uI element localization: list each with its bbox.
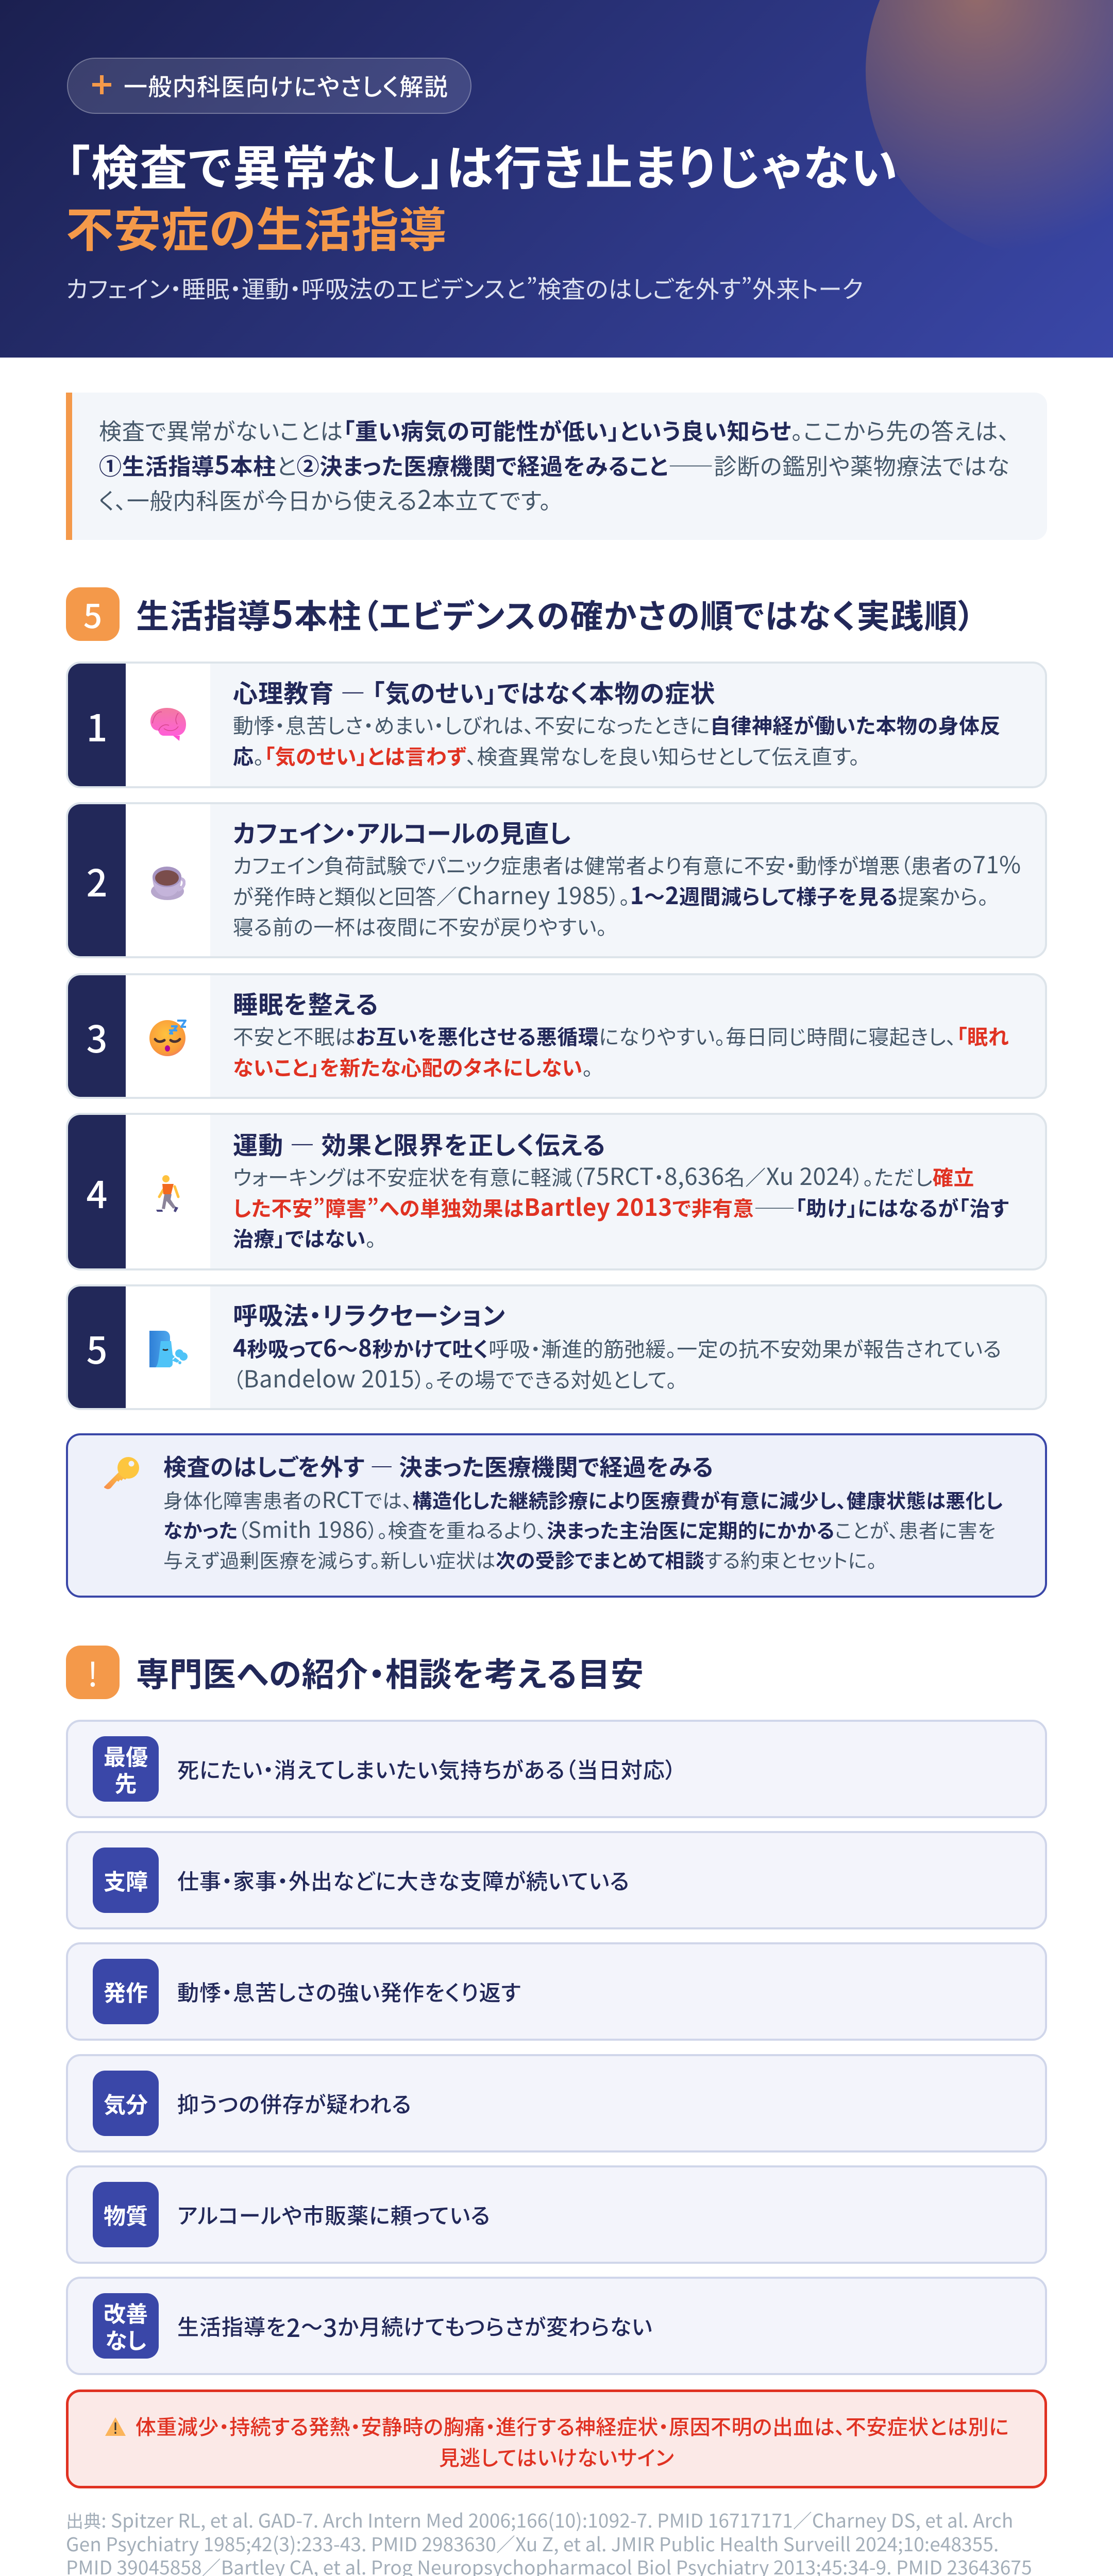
item: impairment <box>66 1831 1047 1929</box>
number 3: 3 <box>86 1009 108 1063</box>
panel: pillar 1 <box>66 662 1047 788</box>
tag <box>93 2182 159 2247</box>
panel: pillar 4 <box>66 1113 1047 1270</box>
pillar body: 不安と不眠はお互いを悪化させる悪循環になりやすい。毎日同じ時間に寝起きし、「眠れ <box>233 1021 1009 1050</box>
red flag warning <box>66 2389 1047 2488</box>
section badge: warning mark: ! <box>88 1649 98 1696</box>
warning text <box>136 2411 1009 2471</box>
main title: 不安症の生活指導 <box>66 192 447 261</box>
pillar body: 寝る前の一杯は夜間に不安が戻りやすい。 <box>233 911 607 941</box>
panel: pillar 3 <box>66 973 1047 1099</box>
references: Gen Psychiatry 1985;42(3):233-43. PMID 2983630／Xu Z, et al. JMIR Public Health Surveill 2024;10:e48355. <box>66 2529 999 2557</box>
pillar body: が発作時と類似と回答／Charney 1985）。1〜2週間減らして様子を見る提案から。 <box>233 877 989 911</box>
item text: 2 <box>286 2308 301 2344</box>
icon: brain <box>126 664 210 786</box>
main title <box>66 130 899 261</box>
warning text: 体重減少・持続する発熱・安静時の胸痛・進行する神経症状・原因不明の出血は、不安症状とは別に <box>136 2411 1009 2441</box>
intro text: く、一般内科医が今日から使える2本立てです。 <box>99 480 551 517</box>
tag <box>93 1959 159 2024</box>
item text: 生活指導を 〜 か月続けてもつらさが変わらない <box>177 2310 653 2342</box>
pillar title: カフェイン・アルコールの見直し <box>233 814 571 850</box>
tag: なし <box>105 2324 146 2355</box>
callout body: 与えず過剰医療を減らす。新しい症状は次の受診でまとめて相談する約束とセットに。 <box>163 1545 877 1573</box>
header banner <box>0 0 1113 358</box>
icon: coffee <box>126 804 210 956</box>
item text: 仕事・家事・外出などに大きな支障が続いている <box>177 1865 630 1896</box>
pillar body: 治療」ではない。 <box>233 1223 376 1252</box>
pillar title: 心理教育 — 「気のせい」ではなく本物の症状 <box>233 673 716 709</box>
item text: 3 <box>323 2308 338 2344</box>
pillar body: ないこと」を新たな心配のタネにしない。 <box>233 1051 593 1081</box>
callout body <box>163 1483 1003 1573</box>
intro callout <box>66 393 1047 540</box>
number 5: 5 <box>86 1320 108 1375</box>
item: mood <box>66 2054 1047 2153</box>
pillar body <box>233 846 1021 941</box>
number 2 <box>68 804 126 956</box>
intro text: 検査で異常がないことは「重い病気の可能性が低い」という良い知らせ。ここから先の答えは、 <box>99 413 1010 446</box>
decorative glow circle <box>866 0 1113 257</box>
pillar body: ウォーキングは不安症状を有意に軽減（75RCT・8,636名／Xu 2024）。ただし確立 <box>233 1158 974 1192</box>
pillar title: 運動 — 効果と限界を正しく伝える <box>233 1125 606 1161</box>
panel: pillar 5 <box>66 1284 1047 1410</box>
panel: pillar 2 <box>66 802 1047 958</box>
tag: 先 <box>114 1766 137 1798</box>
pillar body <box>233 1158 1009 1252</box>
callout body: 身体化障害患者のRCTでは、構造化した継続診療により医療費が有意に減少し、健康状態は悪化し <box>163 1483 1003 1515</box>
item: attacks <box>66 1942 1047 2041</box>
tag: 発作 <box>104 1975 148 2007</box>
pillar body: した不安”障害”への単独効果はBartley 2013で非有意——「助け」にはなるが「治す <box>233 1189 1009 1223</box>
badge text: 一般内科医向けにやさしく解説 <box>124 69 448 103</box>
number 1: 1 <box>86 698 108 752</box>
pillar body <box>233 1330 1002 1394</box>
icon: sleeping face <box>126 975 210 1097</box>
callout title: 検査のはしごを外す — 決まった医療機関で経過をみる <box>163 1449 714 1482</box>
item text: 死にたい・消えてしまいたい気持ちがある（当日対応） <box>177 1753 677 1785</box>
section badge: 5: 5 <box>83 590 102 638</box>
pillar body <box>233 1021 1009 1081</box>
intro text <box>99 413 1010 517</box>
pillar body: カフェイン負荷試験でパニック症患者は健常者より有意に不安・動悸が増悪（患者の71% <box>233 846 1021 880</box>
number 2: 2 <box>86 853 108 907</box>
tag: 気分 <box>104 2088 148 2120</box>
number 1 <box>68 664 126 786</box>
section badge: 5 <box>66 587 120 641</box>
references: 出典: Spitzer RL, et al. GAD-7. Arch Intern Med 2006;166(10):1092-7. PMID 16717171／Charney DS, et al. Arch <box>66 2505 1013 2533</box>
pillar body: 動悸・息苦しさ・めまい・しびれは、不安になったときに自律神経が働いた本物の身体反 <box>233 709 1001 739</box>
references <box>66 2505 1032 2576</box>
tag: 最優 <box>104 1739 148 1771</box>
tag <box>93 1848 159 1913</box>
icon: warning triangle <box>105 2417 126 2436</box>
intro text: ①生活指導5本柱と②決まった医療機関で経過をみること——診断の鑑別や薬物療法ではな <box>99 445 1009 482</box>
icon: key <box>104 1457 139 1489</box>
tag: 支障 <box>104 1864 148 1896</box>
icon: walking person <box>126 1115 210 1268</box>
item: top priority <box>66 1720 1047 1818</box>
main title: 「検査で異常なし」は行き止まりじゃない <box>66 130 899 199</box>
subtitle: カフェイン・睡眠・運動・呼吸法のエビデンスと”検査のはしごを外す”外来トーク <box>66 271 864 305</box>
tag <box>93 2293 159 2359</box>
panel: ladder callout <box>66 1433 1047 1598</box>
item text: 抑うつの併存が疑われる <box>177 2088 412 2119</box>
number 5 <box>68 1286 126 1408</box>
pillar title: 呼吸法・リラクセーション <box>233 1296 505 1332</box>
tag: 物質 <box>104 2199 148 2231</box>
item: substances <box>66 2165 1047 2264</box>
pillar body: 4秒吸って6〜8秒かけて吐く呼吸・漸進的筋弛緩。一定の抗不安効果が報告されている <box>233 1330 1002 1364</box>
section heading: referral: 専門医への紹介・相談を考える目安 <box>136 1649 644 1696</box>
warning text: 見逃してはいけないサイン <box>439 2441 674 2471</box>
number 4: 4 <box>86 1164 108 1219</box>
pillar body <box>233 709 1001 770</box>
badge pill <box>67 58 471 114</box>
item text: アルコールや市販薬に頼っている <box>177 2199 491 2230</box>
pillar body: 応。「気のせい」とは言わず、検査異常なしを良い知らせとして伝え直す。 <box>233 740 860 770</box>
number 3 <box>68 975 126 1097</box>
tag: 改善 <box>104 2297 148 2329</box>
pillar title: 睡眠を整える <box>233 985 379 1021</box>
number 4 <box>68 1115 126 1268</box>
tag <box>93 2071 159 2136</box>
pillar body: （Bandelow 2015）。その場でできる対処として。 <box>233 1360 677 1394</box>
plus icon <box>92 82 111 87</box>
tag <box>93 1736 159 1802</box>
section heading: five pillars: 生活指導5本柱（エビデンスの確かさの順ではなく実践順） <box>136 585 975 639</box>
item: no improvement <box>66 2277 1047 2375</box>
callout body: なかった（Smith 1986）。検査を重ねるより、決まった主治医に定期的にかかることが、患者に害を <box>163 1513 996 1545</box>
item text: 動悸・息苦しさの強い発作をくり返す <box>177 1976 521 2007</box>
section badge: warning mark <box>66 1646 120 1699</box>
icon: exhaling face <box>126 1286 210 1408</box>
